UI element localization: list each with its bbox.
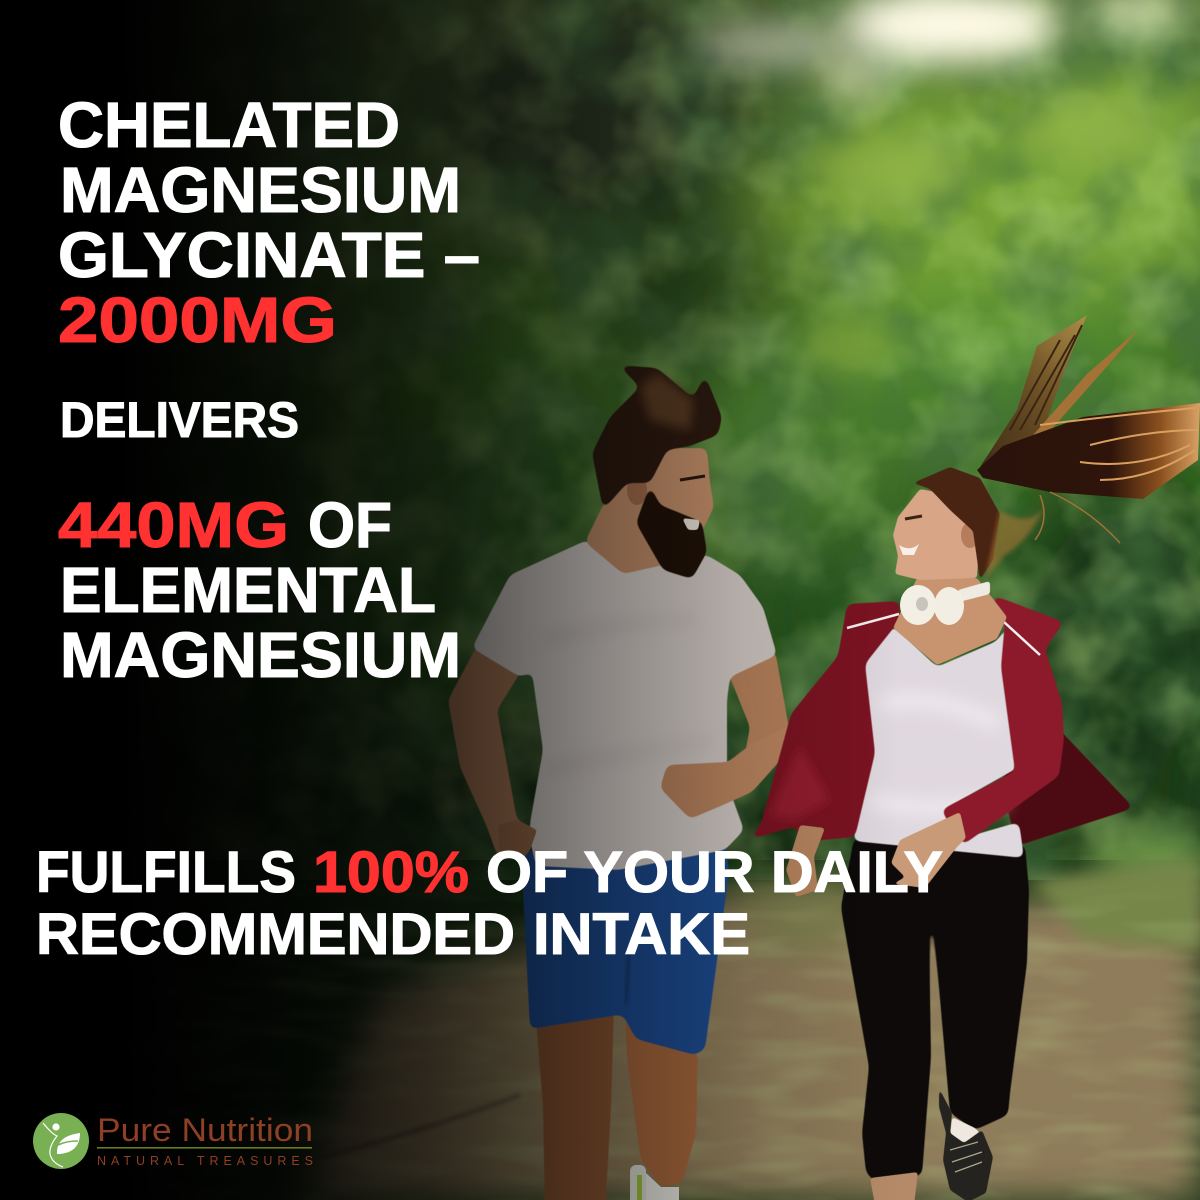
woman: lower calf: [870, 1172, 918, 1200]
callout: fulfills 100% of your daily recommended intake: FULFILLS: [36, 840, 296, 905]
woman: right hand: [891, 812, 966, 888]
man: right leg: [625, 1017, 698, 1187]
man: grey t-shirt: [472, 540, 777, 870]
text: delivers: DELIVERS: [60, 392, 299, 448]
woman: white top: [853, 622, 1024, 858]
brand name: Pure Nutrition: [97, 1112, 313, 1148]
woman: red jacket left: [748, 601, 900, 842]
callout: fulfills 100% of your daily recommended intake: INTAKE: [533, 902, 750, 967]
woman: ponytail: [977, 315, 1200, 543]
man: blue shorts: [521, 840, 729, 1055]
icon: green circle with figure and leaf: [33, 1113, 89, 1169]
woman: hair: [913, 467, 1000, 580]
woman: black leggings: [841, 838, 1029, 1185]
woman: face: [893, 489, 980, 580]
man: neck and face: [585, 448, 714, 574]
logo: pure nutrition: [33, 1112, 313, 1169]
callout: fulfills 100% of your daily recommended intake: [36, 840, 943, 967]
heading: 440mg of elemental magnesium: OF: [308, 489, 392, 561]
man: upper arms: [448, 640, 792, 858]
woman: running shoe: [939, 1088, 993, 1200]
man: beard: [636, 485, 707, 579]
man: hair: [592, 365, 722, 510]
woman runner: [748, 315, 1200, 1200]
heading: chelated magnesium glycinate 2000mg: 2000MG: [58, 284, 337, 356]
man runner: [448, 365, 794, 1200]
woman: red jacket right and sleeve: [941, 594, 1064, 845]
woman: neck and chest: [893, 578, 1007, 665]
woman: sock: [950, 1117, 980, 1143]
heading: 440mg of elemental magnesium: [58, 489, 461, 691]
man: left hand: [498, 820, 537, 860]
callout: fulfills 100% of your daily recommended intake: RECOMMENDED: [36, 902, 515, 967]
woman: left hand: [786, 825, 825, 897]
heading: 440mg of elemental magnesium: ELEMENTAL: [60, 554, 436, 626]
tagline: NATURAL TREASURES: [97, 1154, 313, 1168]
man: ear: [627, 475, 647, 505]
man: eyebrow: [680, 476, 705, 480]
heading: 440mg of elemental magnesium: 440MG: [58, 489, 289, 561]
woman: white headphones: [900, 581, 990, 625]
trail ground: [300, 880, 1200, 1200]
heading: chelated magnesium glycinate 2000mg: [58, 89, 480, 356]
heading: 440mg of elemental magnesium: MAGNESIUM: [60, 619, 461, 691]
heading: chelated magnesium glycinate 2000mg: CHELATED: [58, 89, 400, 161]
man: sock and shoe: [630, 1165, 679, 1200]
woman: jacket back flap: [1000, 725, 1134, 846]
callout: fulfills 100% of your daily recommended intake: 100%: [313, 840, 469, 905]
heading: chelated magnesium glycinate 2000mg: GLYCINATE –: [58, 219, 480, 291]
man: forearm and hand: [660, 725, 794, 819]
man: left leg: [536, 1005, 614, 1200]
heading: chelated magnesium glycinate 2000mg: MAGNESIUM: [60, 154, 461, 226]
callout: fulfills 100% of your daily recommended intake: OF YOUR DAILY: [486, 840, 943, 905]
